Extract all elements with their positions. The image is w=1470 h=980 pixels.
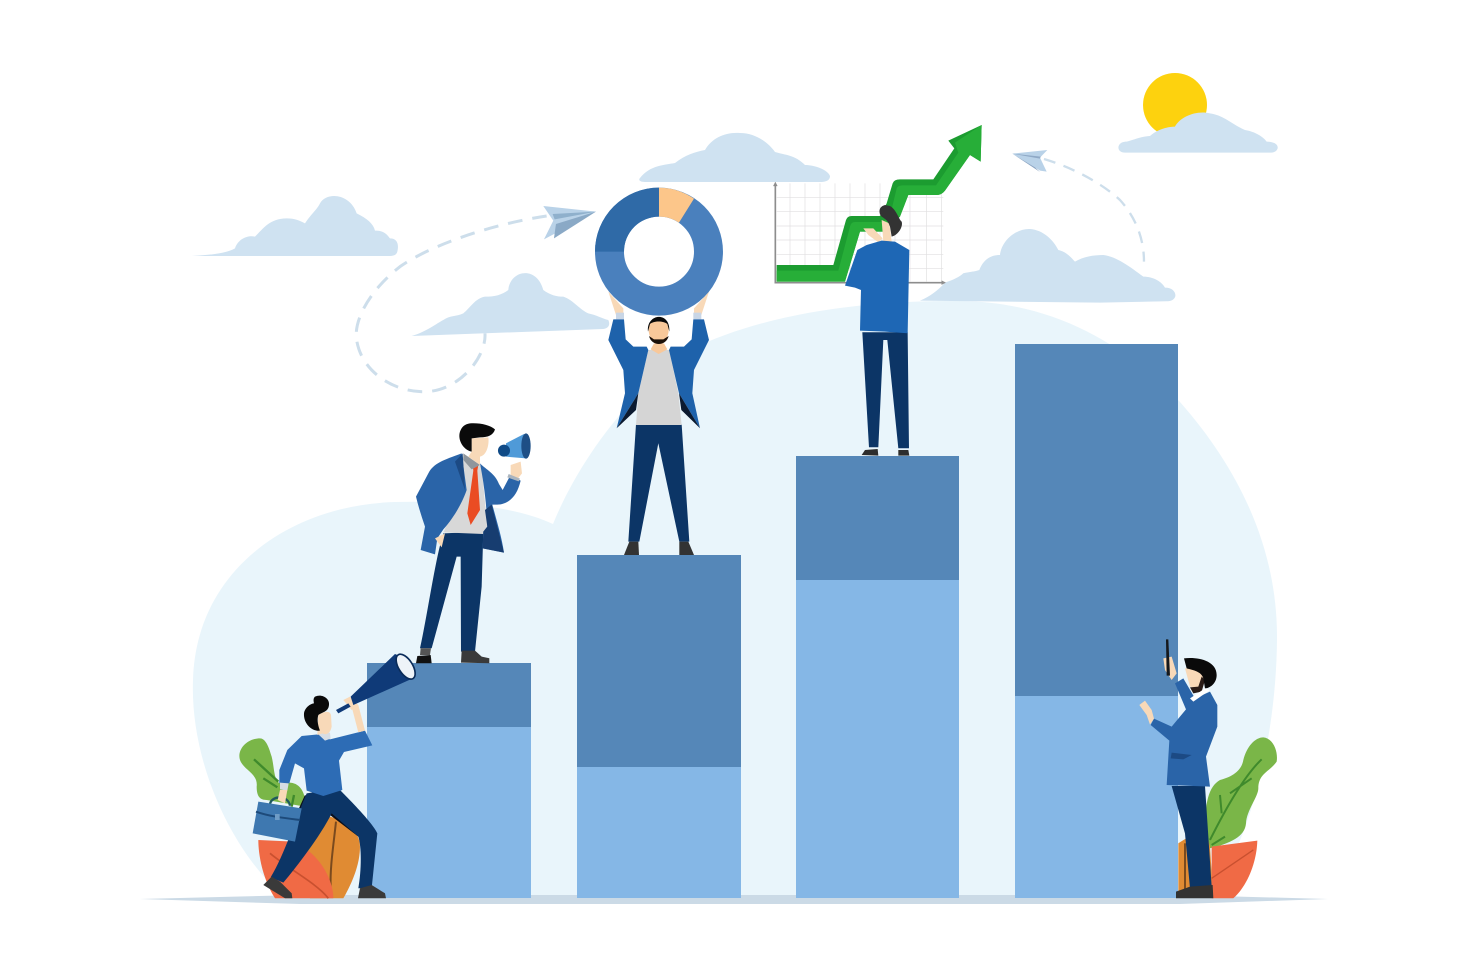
shoes <box>263 877 386 898</box>
shoes <box>624 542 694 555</box>
face <box>1185 668 1207 688</box>
background blob <box>193 301 1277 898</box>
collar and cuff <box>280 733 331 791</box>
neck and collar <box>651 343 667 354</box>
trousers <box>862 332 909 448</box>
hand and neck <box>863 220 892 242</box>
sun <box>1143 73 1207 137</box>
hair <box>459 423 495 452</box>
left paper plane flight path and clouds <box>192 196 609 392</box>
ground line <box>140 895 1328 904</box>
chart grid <box>777 183 943 282</box>
cloud: right of chart <box>920 229 1175 303</box>
shoes <box>1176 885 1213 898</box>
red tie <box>467 465 480 525</box>
briefcase <box>253 797 302 842</box>
figure: man drawing green growth chart <box>773 125 982 456</box>
hair <box>304 696 329 731</box>
hands and face <box>278 697 365 803</box>
jacket <box>845 241 909 333</box>
trousers <box>628 424 689 542</box>
cloud: top centre <box>639 133 830 182</box>
hair <box>1184 658 1217 688</box>
figure: man holding phone beside plant <box>1139 639 1277 898</box>
trousers <box>1172 786 1212 888</box>
cuffs <box>616 313 701 319</box>
right paper plane flight path and cloud <box>920 150 1175 303</box>
trousers <box>271 788 377 888</box>
green growth arrow <box>777 125 982 282</box>
bar 2 <box>577 555 741 898</box>
plant left <box>239 738 360 898</box>
head <box>648 317 669 344</box>
face and collar <box>463 437 489 469</box>
hands <box>608 292 709 315</box>
jacket pocket <box>1171 753 1192 759</box>
donut chart <box>595 188 708 301</box>
jacket <box>608 319 709 428</box>
shoes <box>862 449 909 456</box>
plant right <box>1178 737 1277 898</box>
paper plane right <box>1012 150 1047 172</box>
pocket hand <box>435 533 445 547</box>
figure: man with megaphone <box>416 423 531 663</box>
telescope <box>336 651 419 713</box>
left hand <box>1139 701 1154 725</box>
bar 4 <box>1015 344 1178 898</box>
shoes <box>416 648 489 663</box>
dashed flight path right <box>1044 159 1144 262</box>
hair <box>879 205 902 237</box>
shirt <box>443 457 487 534</box>
cloud: top right under sun <box>1118 112 1278 153</box>
figure: man lifting donut chart <box>595 188 709 555</box>
hand holding megaphone <box>507 462 522 481</box>
figure: man with telescope and briefcase <box>239 651 419 898</box>
paper plane left <box>543 206 596 239</box>
cloud: upper left <box>192 196 398 256</box>
bar 3 <box>796 456 959 898</box>
sweater <box>279 731 372 796</box>
trousers <box>420 532 483 652</box>
jacket <box>416 453 521 554</box>
bar 1 <box>367 663 531 898</box>
beard <box>1190 677 1205 693</box>
chart axes <box>773 182 946 285</box>
collar <box>1190 688 1210 702</box>
cloud: middle left <box>412 273 609 336</box>
shirt <box>636 350 682 425</box>
megaphone <box>498 433 531 459</box>
dashed flight path left <box>356 216 547 392</box>
jacket <box>1151 678 1217 787</box>
right hand and phone <box>1163 639 1177 680</box>
